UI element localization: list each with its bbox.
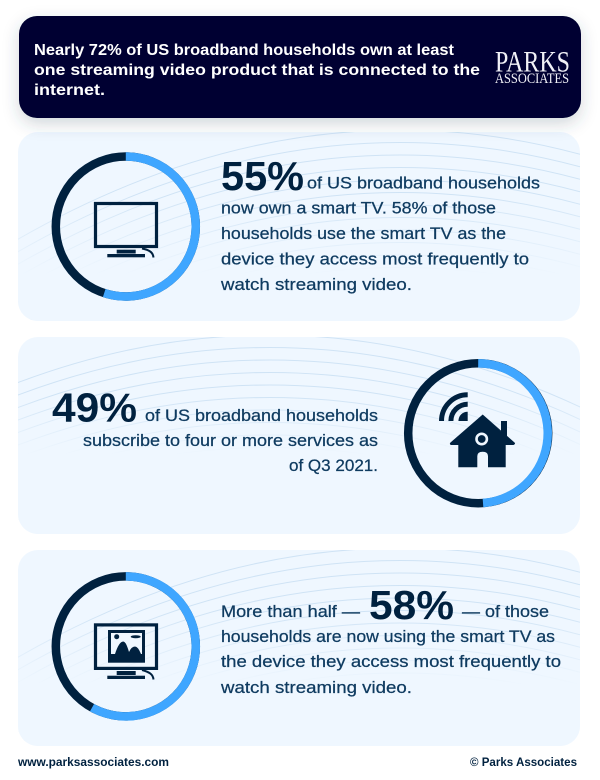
text: streaming services description: of US broadband households bbox=[145, 406, 378, 425]
stat: 58%: 58% bbox=[369, 582, 454, 628]
icon: smart TV bbox=[96, 204, 156, 258]
stat: 49%: 49% bbox=[52, 384, 137, 430]
panel: smart TV ownership bbox=[18, 132, 580, 321]
text: streaming services description: of Q3 2021. bbox=[289, 456, 378, 475]
footer: website: www.parksassociates.com bbox=[17, 757, 169, 769]
donut chart: 58% bbox=[56, 576, 196, 716]
text: streaming services description: subscribe to four or more services as bbox=[83, 431, 378, 450]
donut chart: 55% bbox=[56, 156, 196, 296]
panel: smart TV usage bbox=[18, 550, 580, 746]
icon: wifi house bbox=[442, 395, 515, 467]
text: usage description bbox=[220, 602, 561, 697]
logo: Parks Associates bbox=[495, 46, 570, 87]
heading text: one streaming video product that is connected to the bbox=[34, 62, 480, 79]
text: usage description: households are now using the smart TV as bbox=[221, 627, 555, 646]
text: usage lead-in: More than half — bbox=[221, 602, 360, 621]
text: smart TV description bbox=[220, 174, 540, 294]
text: smart TV description: of US broadband households bbox=[307, 174, 540, 192]
text: smart TV description: now own a smart TV. 58% of those bbox=[221, 198, 496, 218]
stat: 55%: 55% bbox=[221, 153, 304, 199]
footer: copyright: © Parks Associates bbox=[470, 757, 577, 769]
heading text: Nearly 72% of US broadband households own at least bbox=[34, 42, 454, 59]
text: smart TV description: device they access most frequently to bbox=[221, 250, 529, 268]
donut chart: 49% bbox=[408, 363, 548, 503]
text: usage description: watch streaming video. bbox=[220, 678, 412, 697]
panel: streaming services bbox=[18, 337, 580, 534]
text: smart TV description: households use the smart TV as the bbox=[221, 224, 506, 243]
text: usage description: — of those bbox=[462, 602, 549, 621]
header banner bbox=[19, 16, 581, 118]
icon: TV with picture bbox=[96, 625, 156, 680]
logo: Parks Associates: PARKS bbox=[495, 46, 570, 78]
text: streaming services description bbox=[83, 406, 378, 475]
text: smart TV description: watch streaming video. bbox=[220, 275, 412, 294]
heading text: internet. bbox=[34, 82, 105, 99]
logo: Parks Associates: ASSOCIATES bbox=[495, 71, 569, 87]
heading text bbox=[34, 42, 480, 99]
text: usage description: the device they access most frequently to bbox=[221, 652, 561, 671]
